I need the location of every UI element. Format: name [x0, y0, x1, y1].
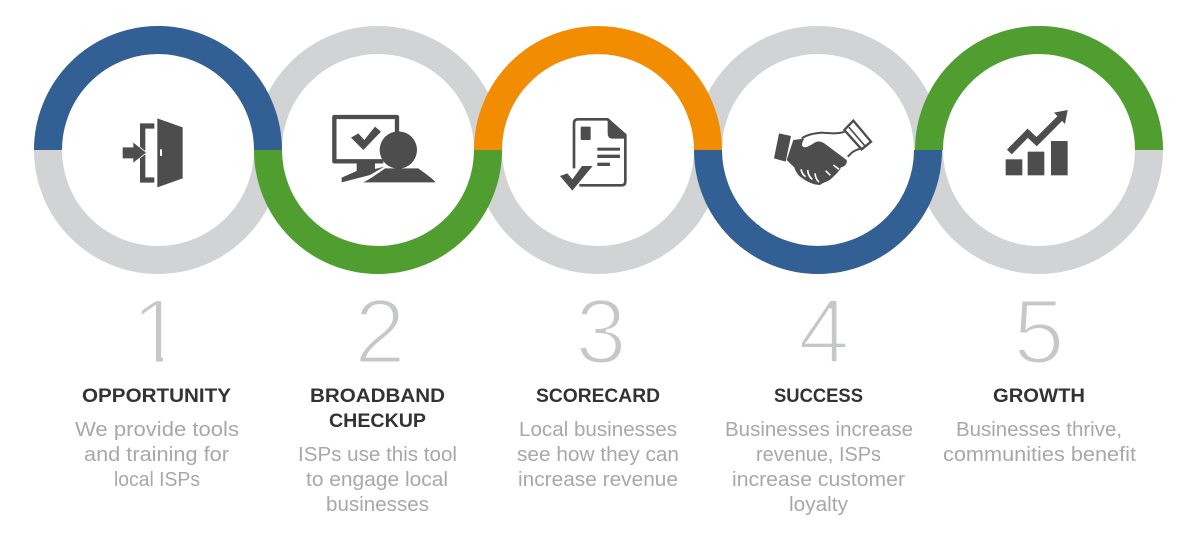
text: scorecard description [517, 419, 679, 491]
step 2 text [298, 281, 457, 516]
arc: ring 2 green bottom [268, 150, 488, 260]
arc: ring 4 blue bottom [708, 150, 928, 260]
step 3 text [517, 281, 679, 491]
icon: monitor with check and person [334, 117, 436, 182]
heading: growth: GROWTH [993, 385, 1085, 407]
text: opportunity description: We provide tools [75, 419, 239, 441]
text: success description: revenue, ISPs [756, 444, 881, 466]
text: opportunity description: and training for [84, 444, 229, 466]
text: opportunity description [75, 419, 239, 491]
arc: ring 3 orange top [488, 40, 708, 150]
number 5: 5 [1013, 281, 1065, 383]
heading: broadband checkup: BROADBAND [310, 385, 445, 407]
text: scorecard description: see how they can [517, 444, 679, 466]
heading: broadband checkup: CHECKUP [329, 410, 426, 432]
icon: scorecard document with check [560, 119, 626, 191]
text: success description: loyalty [789, 494, 848, 516]
number 2: 2 [354, 281, 406, 383]
panel: ring 2 base [268, 40, 488, 260]
panel: ring 1 base [48, 40, 268, 260]
panel: ring 5 base [929, 40, 1149, 260]
heading: broadband checkup [310, 385, 445, 432]
number 1: 1 [131, 281, 183, 383]
step 5 text [943, 281, 1136, 466]
text: opportunity description: local ISPs [114, 469, 200, 491]
arc: ring 1 blue top [48, 40, 268, 150]
step 4 text [725, 281, 913, 516]
text: success description [725, 419, 913, 516]
icon: handshake [774, 121, 871, 185]
text: broadband description: to engage local [306, 469, 448, 491]
heading: scorecard: SCORECARD [536, 385, 660, 407]
text: broadband description: ISPs use this tool [298, 444, 457, 466]
text: broadband description: businesses [326, 494, 429, 516]
icon: rising bar chart with arrow [1006, 110, 1068, 175]
text: scorecard description: increase revenue [518, 469, 678, 491]
number 4: 4 [798, 281, 850, 383]
step 1 text [75, 281, 239, 491]
text: growth description: Businesses thrive, [956, 419, 1122, 441]
panel: ring 4 base [708, 40, 928, 260]
icon: door with entry arrow [123, 118, 183, 187]
text: growth description: communities benefit [943, 444, 1136, 466]
arc: ring 5 green top [929, 40, 1149, 150]
panel: ring 3 base [488, 40, 708, 260]
text: success description: Businesses increase [725, 419, 913, 441]
heading: opportunity: OPPORTUNITY [82, 385, 231, 407]
text: success description: increase customer [732, 469, 905, 491]
text: growth description [943, 419, 1136, 466]
number 3: 3 [575, 281, 627, 383]
text: broadband description [298, 444, 457, 516]
heading: success: SUCCESS [774, 385, 863, 407]
text: scorecard description: Local businesses [519, 419, 677, 441]
